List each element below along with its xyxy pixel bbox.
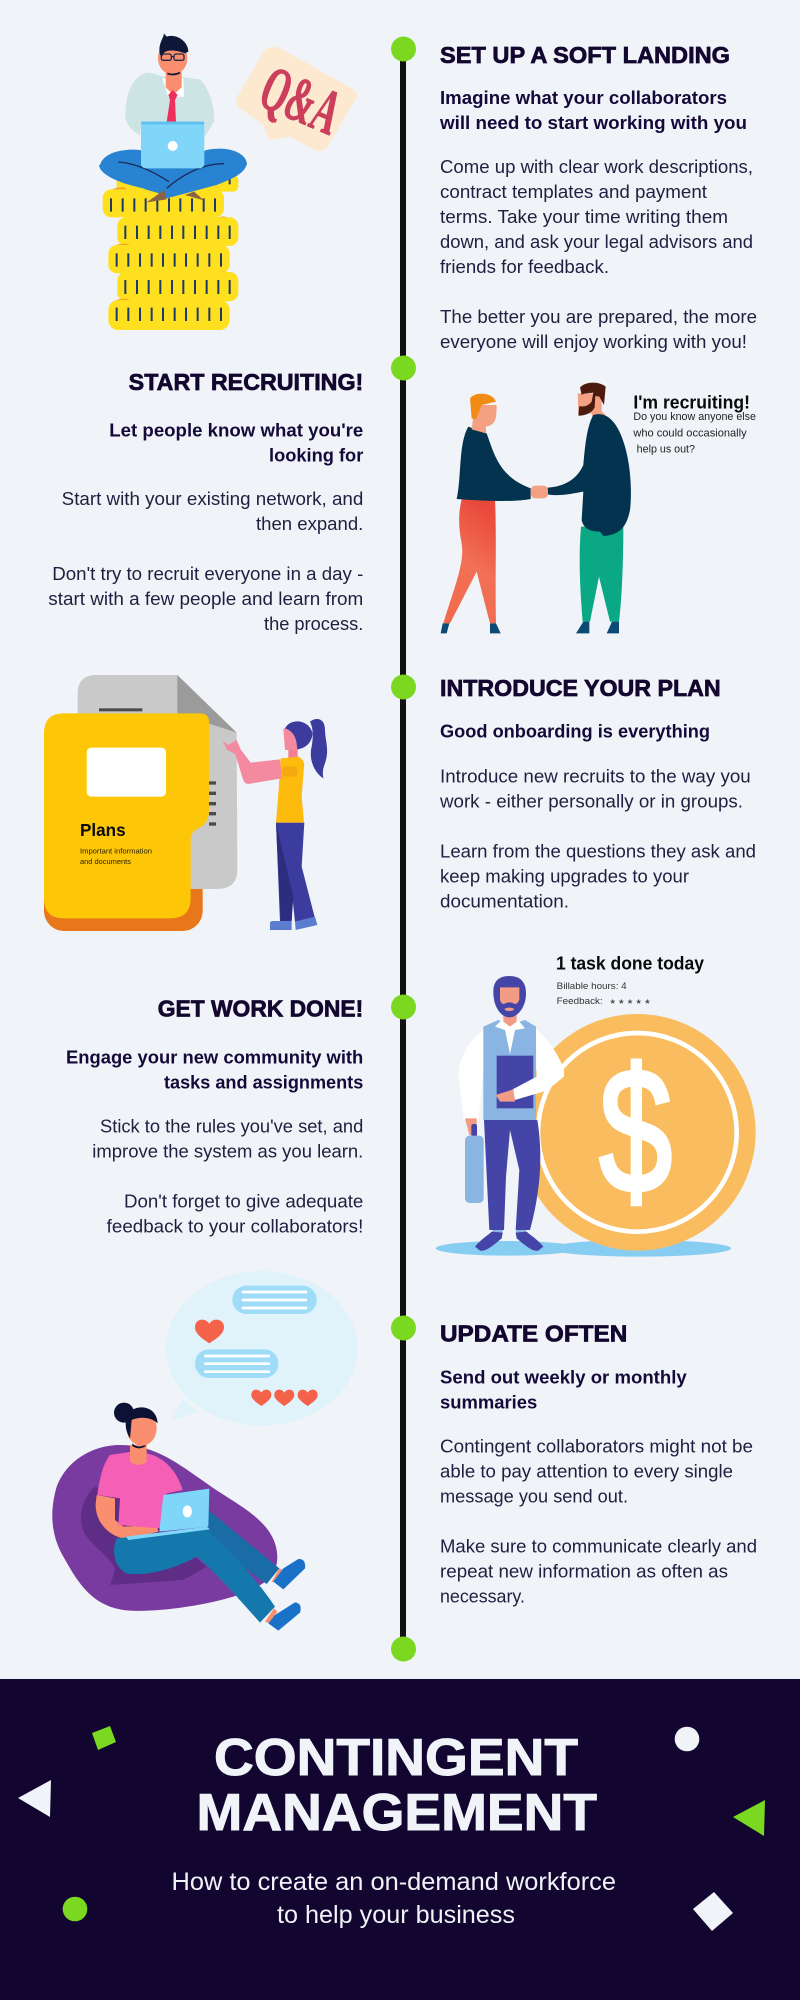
folder: Plans — [80, 820, 126, 840]
body text: down, and ask your legal advisors and — [440, 231, 753, 252]
subheading: Good onboarding is everything — [440, 721, 710, 742]
body text: The better you are prepared, the more — [440, 306, 757, 327]
title — [196, 1729, 597, 1842]
heading: START RECRUITING! — [129, 369, 363, 395]
body text: improve the system as you learn. — [92, 1140, 363, 1161]
timeline — [391, 36, 416, 1662]
title: MANAGEMENT — [196, 1784, 597, 1842]
caption: 1 task done today — [556, 952, 705, 973]
subheading: summaries — [440, 1391, 537, 1412]
subheading — [440, 1366, 687, 1412]
folder: Important information — [80, 846, 152, 855]
chat bubble — [166, 1271, 358, 1426]
subtitle: to help your business — [277, 1901, 515, 1929]
Q&A speech bubble: Q&A — [251, 52, 352, 148]
caption — [632, 391, 756, 456]
body text: then expand. — [256, 513, 363, 534]
caption: who could occasionally — [632, 428, 747, 440]
heading: GET WORK DONE! — [158, 996, 363, 1022]
folder — [44, 713, 209, 918]
section: start recruiting — [48, 369, 363, 634]
man — [99, 33, 247, 202]
body text: everyone will enjoy working with you! — [440, 331, 747, 352]
illustration: man with dollar coin — [436, 952, 756, 1257]
section: introduce your plan — [439, 675, 756, 912]
heading: INTRODUCE YOUR PLAN — [440, 675, 721, 701]
body text: Learn from the questions they ask and — [440, 841, 756, 862]
title: CONTINGENT — [214, 1729, 578, 1787]
body text: Contingent collaborators might not be — [440, 1436, 753, 1457]
subheading: Engage your new community with — [66, 1046, 363, 1067]
subheading: tasks and assignments — [164, 1071, 363, 1092]
woman — [96, 1403, 305, 1631]
coin — [519, 1014, 756, 1251]
caption: Do you know anyone else — [633, 411, 756, 423]
body text: repeat new information as often as — [440, 1560, 728, 1582]
body text: able to pay attention to every single — [440, 1461, 733, 1482]
body text: contract templates and payment — [440, 181, 707, 202]
right man — [531, 383, 631, 633]
illustration: woman on beanbag with chat bubble — [52, 1271, 358, 1631]
folder: and documents — [80, 857, 131, 866]
subheading: Let people know what you're — [109, 420, 363, 441]
caption: help us out? — [637, 444, 695, 456]
left man — [441, 394, 531, 633]
illustration: plans folder and woman — [44, 675, 327, 931]
section: set up a soft landing — [439, 42, 757, 352]
body text — [92, 1115, 363, 1237]
decorative confetti shapes — [18, 1726, 765, 1931]
caption: ★★★★★ — [609, 997, 651, 1006]
heading: SET UP A SOFT LANDING — [440, 42, 730, 68]
subheading: looking for — [269, 445, 363, 466]
body text — [439, 766, 756, 912]
body text: start with a few people and learn from — [48, 588, 363, 609]
body text: Come up with clear work descriptions, — [440, 156, 753, 177]
body text: Don't try to recruit everyone in a day - — [52, 563, 363, 584]
body text: Don't forget to give adequate — [124, 1191, 363, 1212]
woman — [223, 719, 327, 930]
caption — [556, 952, 705, 1006]
subheading: Send out weekly or monthly — [440, 1366, 687, 1387]
subheading — [109, 420, 363, 466]
document — [78, 675, 237, 889]
body text: the process. — [264, 613, 363, 634]
beanbag — [52, 1445, 277, 1611]
heading: UPDATE OFTEN — [440, 1321, 627, 1347]
body text: Introduce new recruits to the way you — [440, 766, 751, 787]
man — [459, 976, 564, 1251]
footer band — [0, 1679, 800, 2000]
body text: message you send out. — [440, 1486, 628, 1507]
shadow — [436, 1240, 731, 1257]
coin: $ — [599, 1031, 672, 1229]
subheading: will need to start working with you — [439, 112, 747, 133]
body text: Stick to the rules you've set, and — [100, 1115, 363, 1136]
body text — [440, 1436, 757, 1606]
caption: Feedback: — [557, 996, 603, 1006]
body text: Make sure to communicate clearly and — [440, 1536, 757, 1556]
body text: Start with your existing network, and — [62, 488, 363, 509]
section: get work done — [66, 996, 363, 1237]
Q&A speech bubble — [236, 47, 357, 151]
subtitle: How to create an on-demand workforce — [172, 1868, 616, 1896]
body text — [440, 156, 757, 352]
body text — [48, 488, 363, 634]
subheading: Imagine what your collaborators — [440, 87, 727, 108]
body text: friends for feedback. — [440, 256, 609, 277]
caption: Billable hours: 4 — [557, 981, 627, 991]
body text: terms. Take your time writing them — [440, 206, 728, 227]
illustration: handshake — [441, 383, 756, 633]
section: update often — [440, 1321, 757, 1606]
illustration: man on coins with Q&A bubble — [99, 33, 357, 330]
body text: keep making upgrades to your — [440, 866, 689, 887]
subheading — [66, 1046, 363, 1092]
folder back — [44, 863, 203, 931]
body text: necessary. — [440, 1586, 525, 1606]
body text: documentation. — [440, 891, 569, 912]
coin stack — [103, 175, 238, 330]
subheading — [439, 87, 747, 133]
subtitle — [172, 1868, 616, 1929]
body text: work - either personally or in groups. — [439, 791, 743, 812]
caption: I'm recruiting! — [633, 391, 750, 412]
body text: feedback to your collaborators! — [107, 1216, 363, 1237]
